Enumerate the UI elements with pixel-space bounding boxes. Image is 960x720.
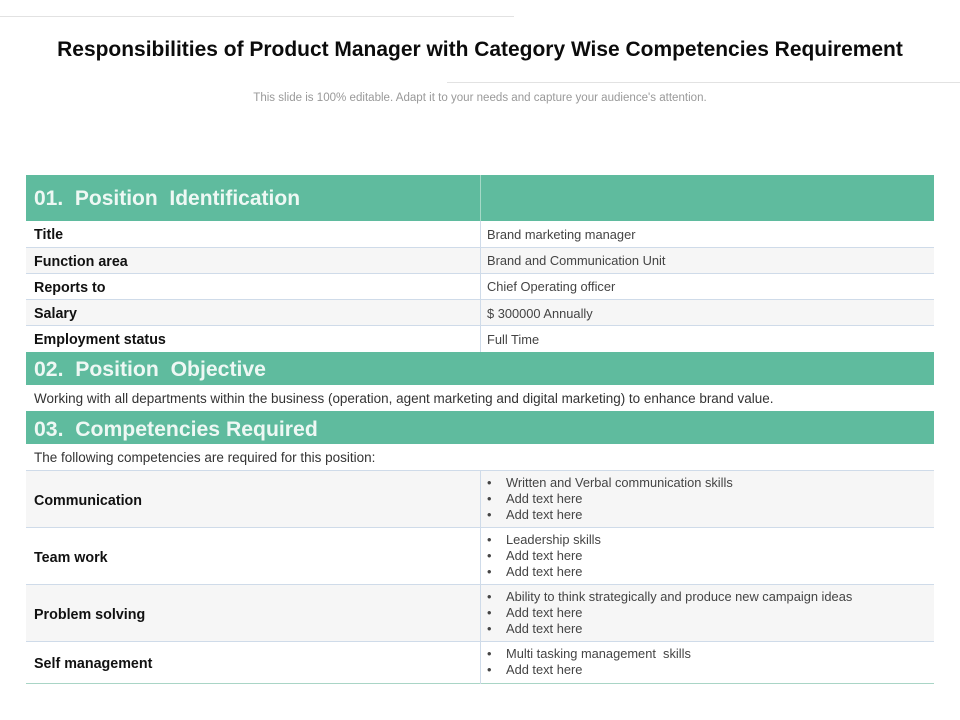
decorative line: right bbox=[447, 82, 960, 83]
decorative line: top bbox=[0, 16, 514, 17]
row: self management: Multi tasking management skills bbox=[506, 646, 691, 661]
heading: 03 Competencies Required: 03. Competencies Required bbox=[34, 418, 318, 441]
row: function area: Function area bbox=[34, 254, 128, 270]
row: team work: Add text here bbox=[506, 548, 582, 563]
row: team work: • bbox=[487, 532, 492, 547]
row: salary bbox=[26, 300, 934, 326]
row: communication: Add text here bbox=[506, 507, 582, 522]
heading: 01 Position Identification bbox=[26, 175, 934, 221]
objective text: Working with all departments within the business (operation, agent marketing and digital marketing) to enhance brand value. bbox=[34, 391, 773, 406]
row: title bbox=[26, 221, 934, 248]
row: problem solving: • bbox=[487, 605, 492, 620]
subtitle: This slide is 100% editable. Adapt it to your needs and capture your audience's attention. bbox=[253, 92, 707, 104]
row: salary: Salary bbox=[34, 306, 77, 322]
heading: 02 Position Objective bbox=[26, 352, 934, 385]
row: team work bbox=[26, 528, 934, 585]
row: reports to: Chief Operating officer bbox=[487, 279, 615, 294]
row: communication: • bbox=[487, 507, 492, 522]
row: reports to: Reports to bbox=[34, 280, 106, 296]
heading: 02 Position Objective: 02. Position Objective bbox=[34, 358, 266, 381]
title: Responsibilities of Product Manager with Category Wise Competencies Requirement bbox=[57, 38, 903, 61]
row: self management: Add text here bbox=[506, 662, 582, 677]
row: problem solving: Add text here bbox=[506, 605, 582, 620]
row: team work: • bbox=[487, 564, 492, 579]
row: problem solving: Problem solving bbox=[34, 607, 145, 623]
row: communication: • bbox=[487, 475, 492, 490]
row: problem solving: • bbox=[487, 589, 492, 604]
heading: 01 Position Identification: 01. Position Identification bbox=[34, 187, 300, 210]
row: problem solving: Ability to think strategically and produce new campaign ideas bbox=[506, 589, 852, 604]
row: communication bbox=[26, 471, 934, 528]
row: salary: $ 300000 Annually bbox=[487, 306, 593, 321]
row: communication: Communication bbox=[34, 493, 142, 509]
panel: competencies required bbox=[26, 411, 934, 684]
row: employment status: Employment status bbox=[34, 332, 166, 348]
row: communication: Written and Verbal communication skills bbox=[506, 475, 733, 490]
row: self management: Self management bbox=[34, 656, 152, 672]
row: function area: Brand and Communication Unit bbox=[487, 253, 665, 268]
row: reports to bbox=[26, 274, 934, 300]
row: team work: Team work bbox=[34, 550, 108, 566]
row: problem solving: • bbox=[487, 621, 492, 636]
row: self management: • bbox=[487, 646, 492, 661]
row: team work: • bbox=[487, 548, 492, 563]
row: team work: Leadership skills bbox=[506, 532, 601, 547]
row: function area bbox=[26, 248, 934, 274]
panel: position identification bbox=[26, 175, 934, 352]
row: self management bbox=[26, 642, 934, 684]
intro text: The following competencies are required for this position: bbox=[34, 450, 375, 465]
row: team work: Add text here bbox=[506, 564, 582, 579]
row: title: Brand marketing manager bbox=[487, 227, 636, 242]
row: employment status bbox=[34, 332, 539, 348]
row: communication: Add text here bbox=[506, 491, 582, 506]
row: problem solving bbox=[26, 585, 934, 642]
row: employment status: Full Time bbox=[487, 332, 539, 347]
heading: 03 Competencies Required bbox=[26, 411, 934, 444]
row: problem solving: Add text here bbox=[506, 621, 582, 636]
row: communication: • bbox=[487, 491, 492, 506]
row: self management: • bbox=[487, 662, 492, 677]
panel: position objective bbox=[26, 352, 934, 406]
row: title: Title bbox=[34, 227, 63, 243]
